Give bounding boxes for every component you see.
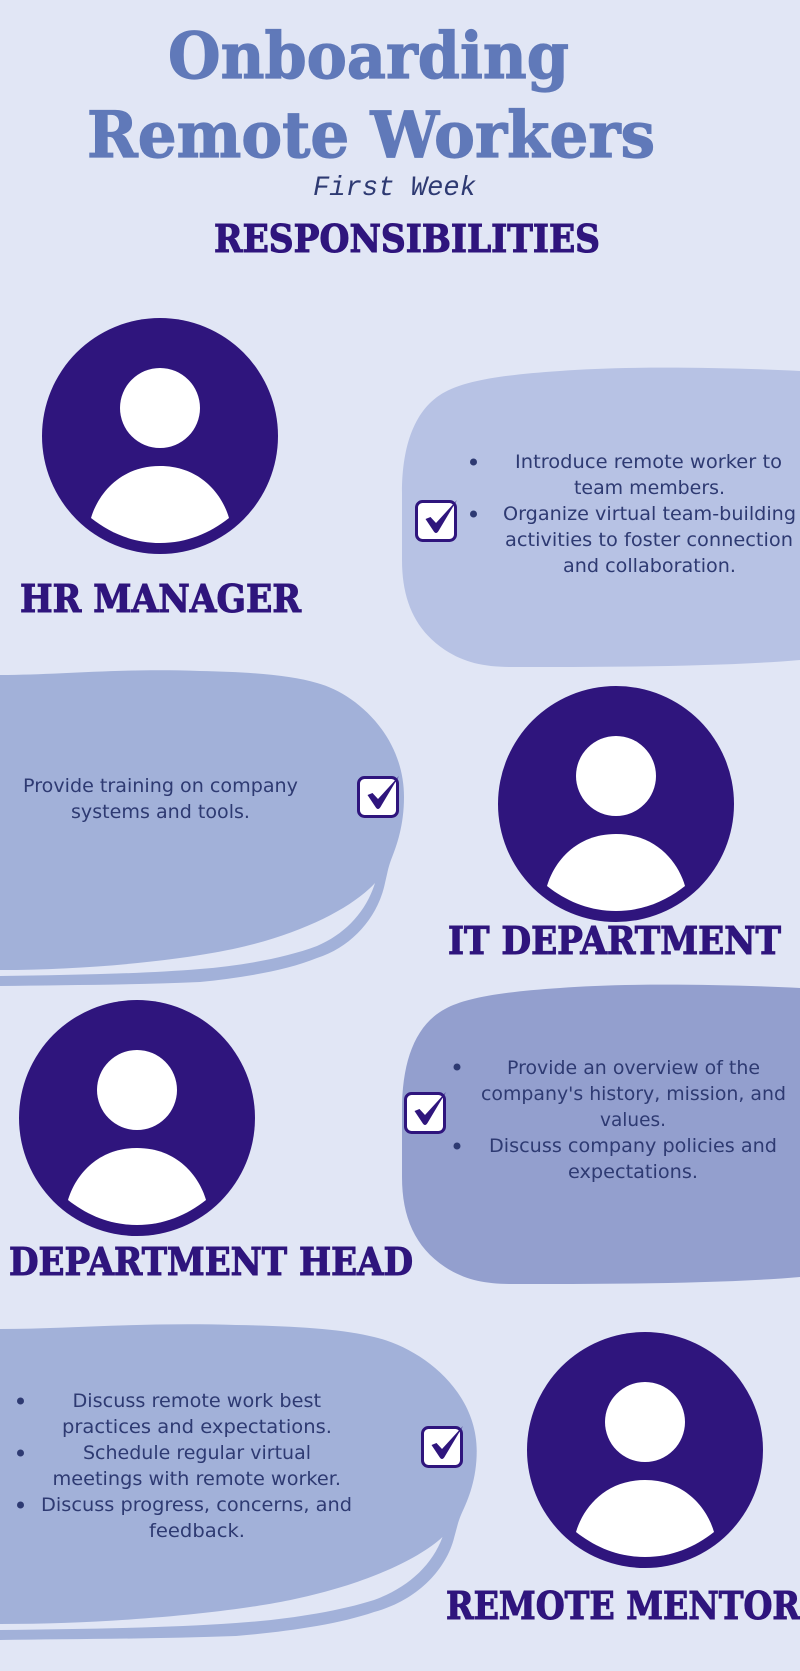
avatar: IT department xyxy=(498,686,734,922)
task list: department head xyxy=(454,1057,786,1183)
task list: HR manager: activities to foster connection xyxy=(505,529,793,551)
title: Remote Workers xyxy=(87,98,655,173)
task list: remote mentor xyxy=(17,1390,352,1542)
icon: checkbox department head xyxy=(406,1092,446,1132)
heading: HR manager: HR MANAGER xyxy=(20,576,301,621)
heading: responsibilities: RESPONSIBILITIES xyxy=(214,216,600,261)
task list: department head: expectations. xyxy=(568,1161,698,1183)
task list: remote mentor: Discuss remote work best xyxy=(72,1390,321,1412)
task list: remote mentor: Schedule regular virtual xyxy=(83,1442,311,1464)
subtitle: First Week xyxy=(313,173,476,204)
task list: HR manager: and collaboration. xyxy=(563,555,736,577)
task list: department head: company's history, mission, and xyxy=(481,1083,786,1105)
title: Onboarding xyxy=(168,19,569,94)
task list: remote mentor: feedback. xyxy=(149,1520,245,1542)
task text: IT department: Provide training on company xyxy=(23,775,298,797)
task list: remote mentor: practices and expectations. xyxy=(62,1416,332,1438)
avatar: HR manager xyxy=(42,318,278,554)
task text: IT department: systems and tools. xyxy=(71,801,250,823)
task list: remote mentor: Discuss progress, concerns, and xyxy=(41,1494,352,1516)
task list: HR manager: Introduce remote worker to xyxy=(515,451,782,473)
icon: checkbox HR manager xyxy=(416,500,457,540)
title xyxy=(87,19,655,173)
task list: department head: Discuss company policies and xyxy=(489,1135,777,1157)
task list: HR manager xyxy=(470,451,796,577)
task text: IT department xyxy=(23,775,298,823)
panel: HR manager tasks xyxy=(402,368,800,667)
icon: checkbox remote mentor xyxy=(422,1426,463,1466)
panel: department head tasks xyxy=(402,985,800,1284)
task list: department head: Provide an overview of the xyxy=(507,1057,760,1079)
panel: IT department tasks xyxy=(0,670,404,986)
heading: department head: DEPARTMENT HEAD xyxy=(9,1239,413,1284)
task list: HR manager: Organize virtual team-building xyxy=(503,503,796,525)
task list: remote mentor: meetings with remote worker. xyxy=(52,1468,341,1490)
avatar: department head xyxy=(19,1000,255,1236)
avatar: remote mentor xyxy=(527,1332,763,1568)
icon: checkbox IT department xyxy=(358,776,399,816)
panel: remote mentor tasks xyxy=(0,1324,477,1640)
task list: department head: values. xyxy=(600,1109,666,1131)
task list: HR manager: team members. xyxy=(574,477,725,499)
